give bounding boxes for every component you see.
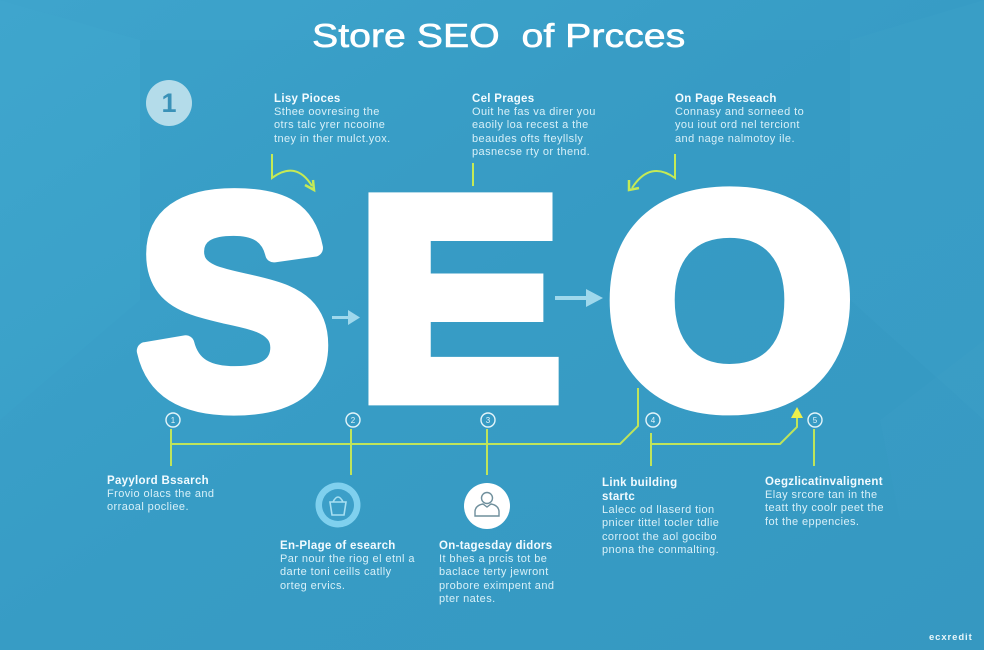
step markers: 2 xyxy=(351,416,356,425)
text: On-tages day didors: baclace terty jewront xyxy=(439,566,549,578)
arrow: top right curved xyxy=(629,154,675,190)
letter E: E xyxy=(357,139,562,458)
text: Payyiord Research: Payylord Bssarch xyxy=(107,475,209,487)
text: Cel Prages: eaoily loa recest a the xyxy=(472,119,589,131)
icon: person xyxy=(464,483,510,529)
text: Cel Prages: Cel Prages xyxy=(472,93,534,105)
timeline xyxy=(171,388,814,475)
text: Oogrification alignment xyxy=(765,476,884,528)
text: Oogrification alignment: Elay srcore tan in the xyxy=(765,489,878,501)
text: Link building starte: startc xyxy=(602,491,635,503)
text: En-Plage of esearch xyxy=(280,540,415,592)
title: Store SEO of Prcces xyxy=(312,17,685,54)
text: Link building starte xyxy=(602,477,719,556)
text: Cel Prages: beaudes ofts fteyllsly xyxy=(472,133,583,145)
text: Oogrification alignment: Oegzlicatinvalignent xyxy=(765,476,883,488)
text: Lisy Pioces: Sthee oovresing the xyxy=(274,106,380,118)
step markers: 4 xyxy=(651,416,656,425)
text: On Page Research xyxy=(675,93,804,145)
text: On Page Research: and nage nalmotoy ile. xyxy=(675,133,795,145)
credit: ecxredit xyxy=(929,632,973,643)
step markers: 5 xyxy=(813,416,818,425)
text: Cel Prages: Ouit he fas va direr you xyxy=(472,106,596,118)
arrow: top left curved xyxy=(272,154,314,190)
text: En-Plage of esearch: orteg ervics. xyxy=(280,580,345,592)
step markers: 3 xyxy=(486,416,491,425)
text: On-tages day didors: It bhes a prcis tot be xyxy=(439,553,547,565)
text: Oogrification alignment: fot the eppencies. xyxy=(765,516,859,528)
step markers: 1 xyxy=(171,416,176,425)
text: En-Plage of esearch: darte toni ceills catlly xyxy=(280,566,392,578)
text: Lisy Pioces: tney in ther mulct.yox. xyxy=(274,133,391,145)
badge: step 1 xyxy=(146,80,192,126)
text: Oogrification alignment: teatt thy coolr peet the xyxy=(765,502,884,514)
text: Link building starte: pnona the conmalting. xyxy=(602,544,719,556)
text: En-Plage of esearch: En-Plage of esearch xyxy=(280,540,396,552)
text: On-tages day didors: pter nates. xyxy=(439,593,496,605)
text: Lisy Pioces xyxy=(274,93,391,145)
text: On-tages day didors: On-tagesday didors xyxy=(439,540,552,552)
text: Link building starte: Link building xyxy=(602,477,677,489)
text: On Page Research: you iout ord nel terciont xyxy=(675,119,800,131)
icon: basket xyxy=(316,482,360,528)
text: Lisy Pioces: otrs talc yrer ncooine xyxy=(274,119,385,131)
connector: top middle xyxy=(472,163,474,186)
arrow head: timeline xyxy=(791,407,803,418)
badge: step 1: 1 xyxy=(161,88,177,118)
letter O: O xyxy=(606,134,854,468)
text: On-tages day didors xyxy=(439,540,554,605)
text: Payyiord Research xyxy=(107,475,214,513)
text: Link building starte: corroot the aol gocibo xyxy=(602,531,717,543)
step markers xyxy=(166,413,822,427)
text: On Page Research: Connasy and sorneed to xyxy=(675,106,804,118)
text: Link building starte: Lalecc od llaserd tion xyxy=(602,504,715,516)
text: Cel Prages xyxy=(472,93,596,158)
arrow: S to E xyxy=(332,310,360,325)
text: On-tages day didors: probore eximpent and xyxy=(439,580,554,592)
text: Cel Prages: pasnecse rty or thend. xyxy=(472,146,590,158)
text: Lisy Pioces: Lisy Pioces xyxy=(274,93,341,105)
text: Payyiord Research: orraoal pocliee. xyxy=(107,501,189,513)
text: Payyiord Research: Frovio olacs the and xyxy=(107,488,214,500)
arrow: E to O xyxy=(555,289,603,307)
letter S: S xyxy=(137,136,331,468)
text: Link building starte: pnicer tittel tocler tdlie xyxy=(602,517,719,529)
text: En-Plage of esearch: Par nour the riog el etnl a xyxy=(280,553,415,565)
text: On Page Research: On Page Reseach xyxy=(675,93,777,105)
